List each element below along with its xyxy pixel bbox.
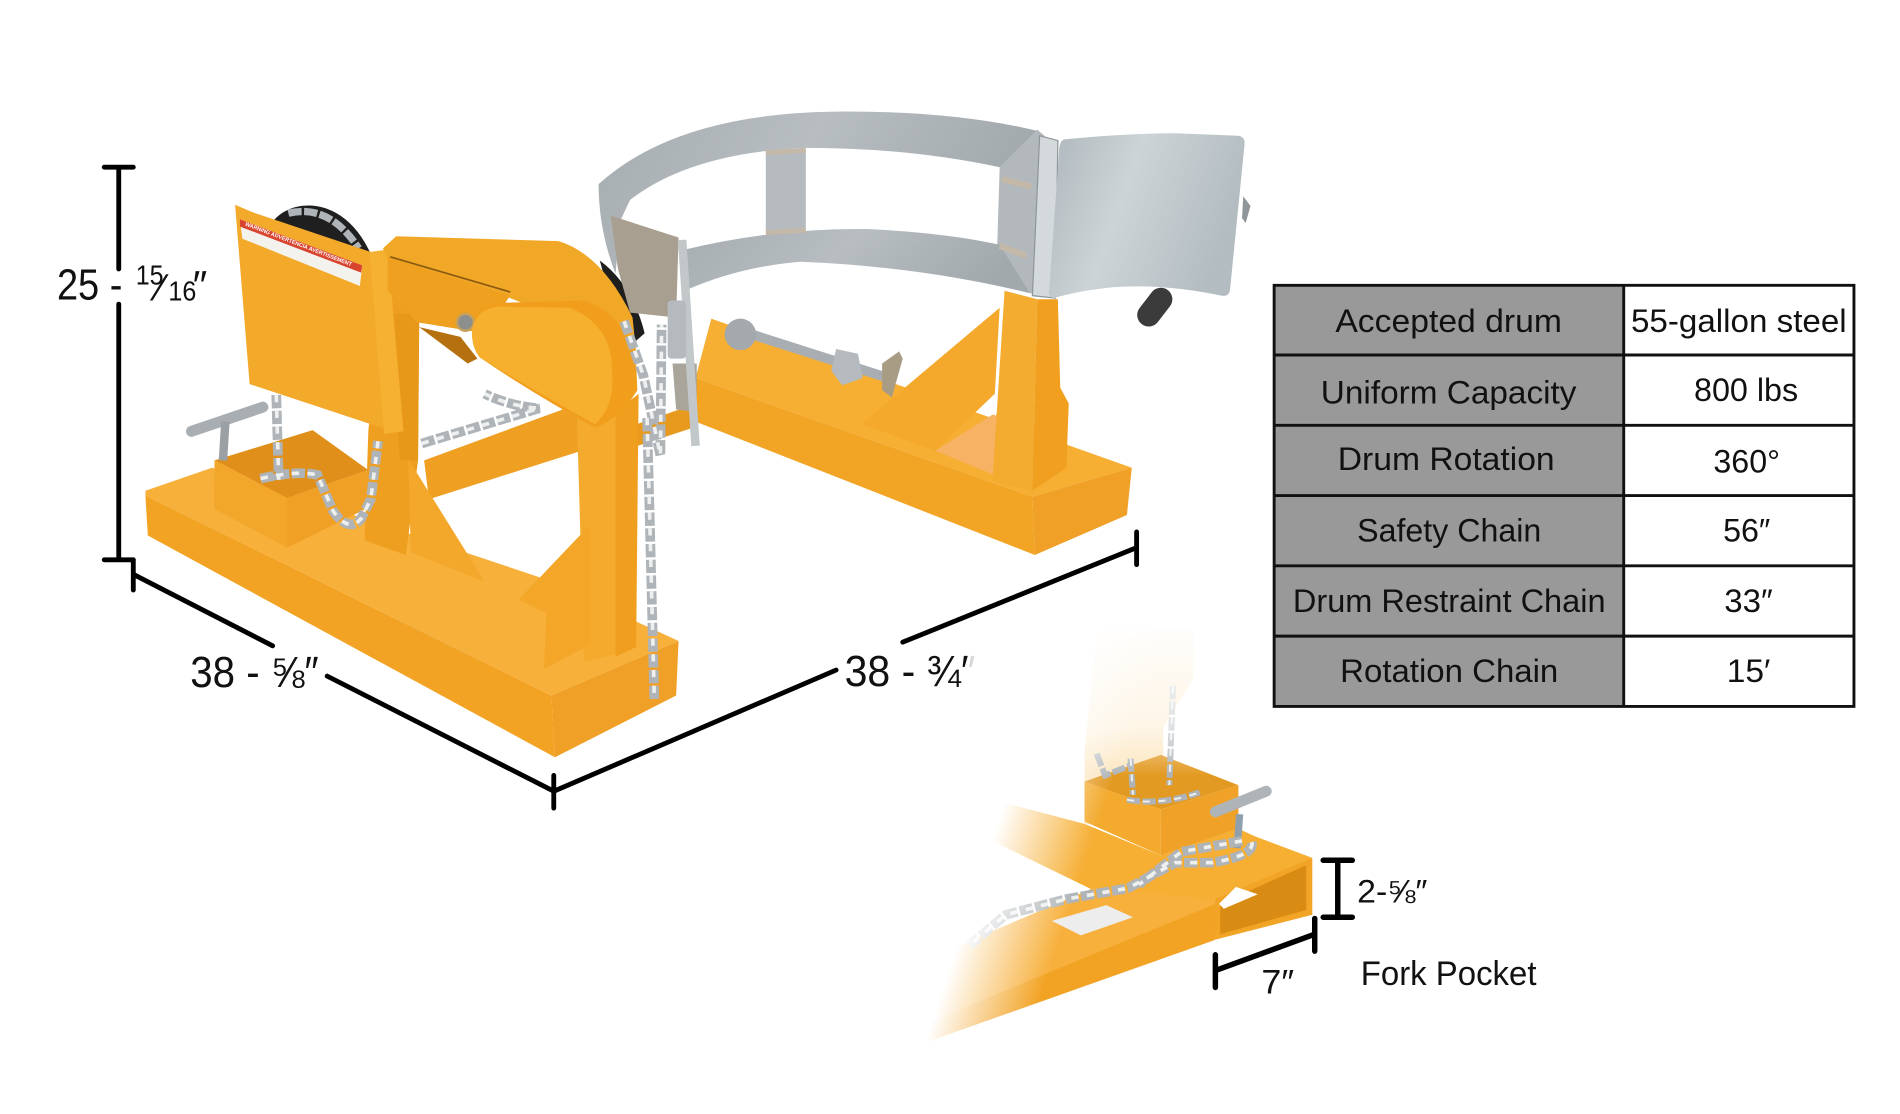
- fork pocket caption: Fork Pocket: [1361, 955, 1537, 993]
- height dimension: 25 - 15/16: 15: [136, 260, 164, 291]
- inset long beam top: [938, 888, 1216, 1018]
- swing door plate: [1049, 133, 1245, 298]
- drum carrier product illustration: [145, 111, 1251, 757]
- door hinge: [1032, 136, 1058, 298]
- row: rotation chain: [1340, 652, 1770, 689]
- bolt on door: [1242, 196, 1251, 223]
- row: accepted drum: 55-gallon steel: [1631, 302, 1847, 339]
- pocket width dimension: 7 inch: [1215, 918, 1315, 1002]
- height dimension: 25 - 15/16: ″: [193, 262, 207, 308]
- right depth dimension: 38 - 3/4: 38 - ¾″: [845, 648, 975, 696]
- inset long beam side: [927, 904, 1215, 1042]
- gray latch plate: [611, 216, 697, 412]
- warning label text: WARNING ADVERTENCIA AVERTISSEMENT: [244, 222, 353, 268]
- guard plate with warning label: [235, 205, 404, 434]
- faded upright: [1085, 630, 1194, 824]
- inset chain bin: [1085, 755, 1238, 855]
- left width dimension: 38 - 5/8: [133, 560, 554, 791]
- row: drum restraint chain: 33″: [1724, 582, 1773, 619]
- rotating arm housing: [383, 236, 637, 363]
- fork pocket detail illustration: [929, 649, 1312, 1041]
- data plate: [1052, 905, 1133, 935]
- inset T-handle: [1215, 791, 1266, 848]
- front post and gusset: [519, 394, 639, 669]
- row: uniform capacity: 800 lbs: [1694, 371, 1798, 408]
- row: drum restraint chain: Drum Restraint Chain: [1293, 582, 1606, 619]
- inset chain in bin: [1097, 686, 1200, 802]
- height dimension: 25 - 15/16: [57, 167, 207, 560]
- rubber handle: [1149, 299, 1161, 315]
- black chain wheel: [273, 205, 372, 257]
- chain bin box: [214, 430, 368, 548]
- left width dimension: 38 - 5/8: 38 - ⅝″: [190, 649, 319, 697]
- pocket width dimension: 7 inch: 7″: [1261, 964, 1294, 1002]
- wheel edge behind arm: [600, 261, 645, 351]
- table grid: [1274, 285, 1854, 706]
- cam face: [472, 300, 637, 428]
- safety chain: [624, 321, 662, 700]
- rear chain: [422, 394, 539, 443]
- table label column: [1275, 286, 1624, 706]
- T-handle: [191, 407, 263, 460]
- row: drum rotation: 360°: [1713, 443, 1780, 480]
- rotating rod with knobs: [725, 319, 903, 397]
- rear gusset: [408, 459, 485, 582]
- bin chain: [261, 395, 378, 524]
- rear cross beam: [424, 403, 697, 499]
- height dimension: 25 - 15/16: ⁄: [150, 266, 170, 308]
- rear left post: [365, 254, 419, 555]
- row: rotation chain: 15′: [1727, 652, 1770, 689]
- right base beam: [696, 319, 1132, 555]
- inset chain: [969, 841, 1252, 945]
- galvanised drum ring: [599, 111, 1045, 294]
- fork pocket opening: [1213, 858, 1312, 940]
- specification table: [1274, 285, 1854, 706]
- row: drum restraint chain: [1293, 582, 1773, 619]
- row: drum rotation: [1338, 440, 1780, 480]
- row: drum rotation: Drum Rotation: [1338, 440, 1555, 477]
- row: rotation chain: Rotation Chain: [1340, 652, 1558, 689]
- row: safety chain: 56″: [1723, 512, 1770, 549]
- row: uniform capacity: [1321, 371, 1798, 410]
- height dimension: 25 - 15/16: 16: [168, 275, 196, 306]
- fade overlay at top of detail: [969, 618, 1260, 775]
- pivot pin: [457, 314, 474, 331]
- right upright and gusset: [862, 291, 1069, 491]
- row: safety chain: Safety Chain: [1357, 512, 1541, 549]
- infographic canvas: [58, 112, 1856, 1041]
- row: safety chain: [1357, 512, 1770, 549]
- left base beam: [145, 468, 679, 757]
- pocket height dimension: 2-5/8: [1323, 860, 1427, 917]
- row: uniform capacity: Uniform Capacity: [1321, 373, 1577, 410]
- height dimension: 25 - 15/16: 25 -: [57, 261, 122, 309]
- locking pin: [668, 240, 696, 446]
- pocket height dimension: 2-5/8: 2-⅝″: [1357, 873, 1427, 910]
- row: accepted drum: [1335, 302, 1847, 339]
- right depth dimension: 38 - 3/4: [554, 532, 1137, 808]
- inset cross plate: [996, 804, 1312, 902]
- row: accepted drum: Accepted drum: [1335, 302, 1562, 339]
